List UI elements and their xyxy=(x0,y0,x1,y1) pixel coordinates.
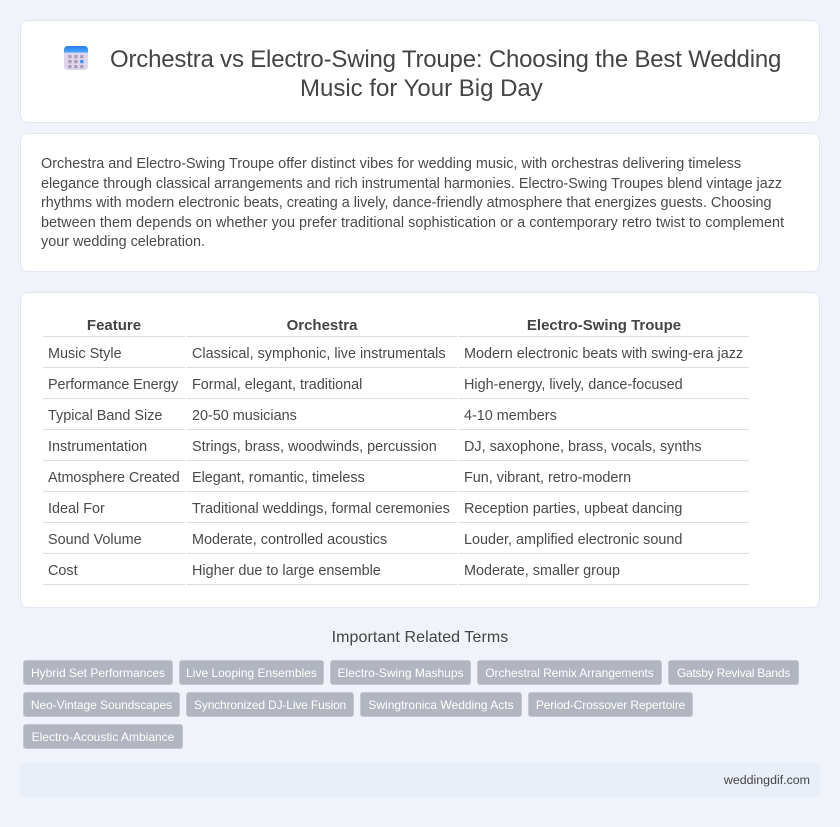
related term chips: Gatsby Revival Bands xyxy=(677,666,790,680)
related term chips: Neo-Vintage Soundscapes xyxy=(31,698,172,712)
related term chips: Electro-Acoustic Ambiance xyxy=(32,730,174,744)
related term chips: Electro-Swing Mashups xyxy=(337,666,464,680)
title: Music for Your Big Day xyxy=(300,75,543,102)
comparison table xyxy=(43,317,749,585)
comparison table: Feature xyxy=(87,317,141,334)
comparison table: Classical, symphonic, live instrumentals xyxy=(192,346,446,362)
comparison table: Instrumentation xyxy=(48,439,147,455)
comparison table: Traditional weddings, formal ceremonies xyxy=(192,501,450,517)
header card xyxy=(20,20,820,123)
related term chips xyxy=(23,660,799,749)
comparison table: Fun, vibrant, retro-modern xyxy=(464,470,631,486)
heading: related terms: Important Related Terms xyxy=(332,629,508,646)
related term chips: Swingtronica Wedding Acts xyxy=(368,698,514,712)
comparison table: Modern electronic beats with swing-era jazz xyxy=(464,346,743,362)
panel: intro xyxy=(20,133,820,272)
title xyxy=(110,46,781,102)
comparison table: High-energy, lively, dance-focused xyxy=(464,377,683,393)
comparison table: Performance Energy xyxy=(48,377,178,393)
comparison table: Elegant, romantic, timeless xyxy=(192,470,365,486)
comparison table: Cost xyxy=(48,563,78,579)
comparison table: Typical Band Size xyxy=(48,408,162,424)
icon: calendar xyxy=(64,46,88,70)
panel: comparison table xyxy=(20,292,820,608)
footer bar xyxy=(20,763,820,797)
comparison table: Strings, brass, woodwinds, percussion xyxy=(192,439,437,455)
intro text: elegance through classical arrangements and rich instrumental harmonies. Electro-Swing Troupes blend vintage jazz xyxy=(41,176,782,192)
comparison table: 4-10 members xyxy=(464,408,557,424)
intro text: between them depends on whether you prefer traditional sophistication or a contemporary retro twist to complement xyxy=(41,214,784,230)
comparison table: DJ, saxophone, brass, vocals, synths xyxy=(464,439,702,455)
comparison table: Sound Volume xyxy=(48,532,142,548)
footer source: weddingdif.com xyxy=(724,773,810,787)
comparison table: Atmosphere Created xyxy=(48,470,180,486)
related term chips: Live Looping Ensembles xyxy=(186,666,317,680)
intro text: rhythms with modern electronic beats, creating a lively, dance-friendly atmosphere that energizes guests. Choosing xyxy=(41,195,772,211)
intro text xyxy=(41,156,784,250)
comparison table: Louder, amplified electronic sound xyxy=(464,532,682,548)
comparison table: Moderate, controlled acoustics xyxy=(192,532,387,548)
intro text: Orchestra and Electro-Swing Troupe offer distinct vibes for wedding music, with orchestras delivering timeless xyxy=(41,156,741,172)
intro text: your wedding celebration. xyxy=(41,234,205,250)
comparison table: Formal, elegant, traditional xyxy=(192,377,362,393)
related term chips: Hybrid Set Performances xyxy=(31,666,165,680)
related term chips: Orchestral Remix Arrangements xyxy=(485,666,654,680)
comparison table: Ideal For xyxy=(48,501,105,517)
related term chips: Period-Crossover Repertoire xyxy=(536,698,685,712)
comparison table: Reception parties, upbeat dancing xyxy=(464,501,682,517)
comparison table: Music Style xyxy=(48,346,122,362)
title: Orchestra vs Electro-Swing Troupe: Choosing the Best Wedding xyxy=(110,46,781,73)
comparison table: Electro-Swing Troupe xyxy=(527,317,681,334)
comparison table: Orchestra xyxy=(287,317,357,334)
comparison table: Higher due to large ensemble xyxy=(192,563,381,579)
comparison table: 20-50 musicians xyxy=(192,408,297,424)
related term chips: Synchronized DJ-Live Fusion xyxy=(194,698,346,712)
comparison table: Moderate, smaller group xyxy=(464,563,620,579)
